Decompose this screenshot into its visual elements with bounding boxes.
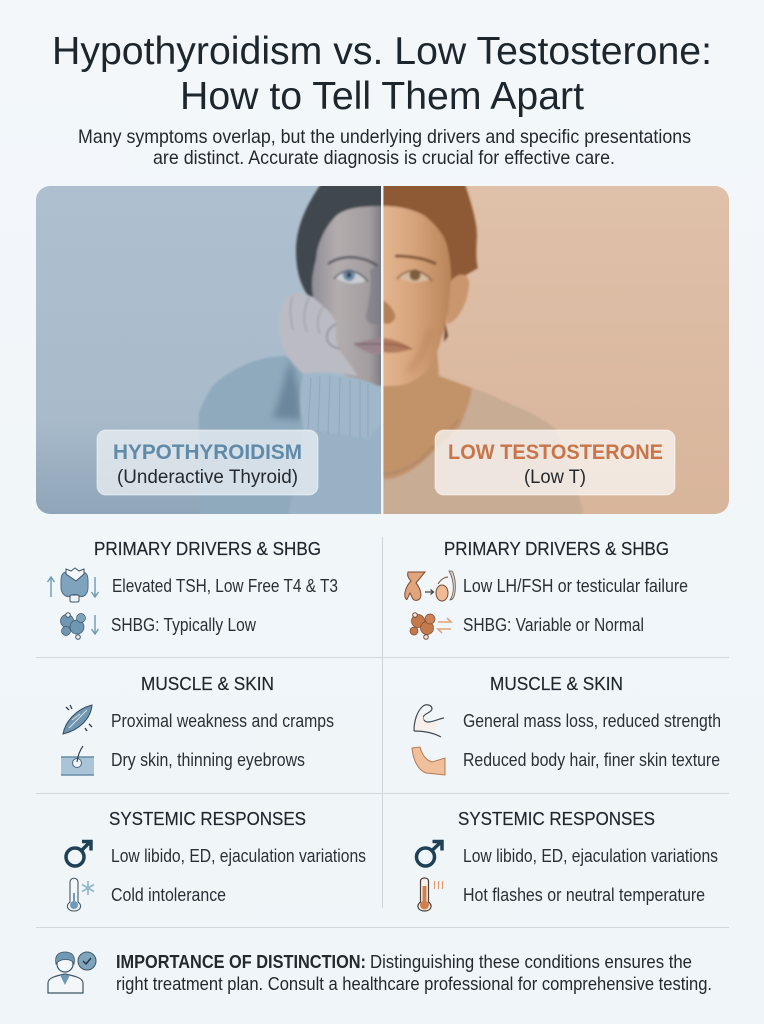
subtitle bbox=[78, 126, 691, 169]
icon: flexed arm bbox=[414, 705, 444, 737]
panel: primary drivers right: Low LH/FSH or testicular failure bbox=[463, 576, 688, 596]
label: hypothyroidism bbox=[97, 430, 318, 495]
icon: thermometer hot bbox=[418, 878, 443, 911]
panel: primary drivers right: PRIMARY DRIVERS & SHBG bbox=[444, 538, 669, 559]
portrait: low testosterone side bbox=[382, 184, 730, 516]
panel: muscle and skin left: Dry skin, thinning eyebrows bbox=[111, 750, 305, 770]
panel: systemic responses left: SYSTEMIC RESPONSES bbox=[109, 808, 306, 829]
panel: systemic responses right bbox=[416, 808, 718, 911]
panel: muscle and skin right: MUSCLE & SKIN bbox=[490, 673, 623, 694]
panel: muscle and skin right bbox=[412, 673, 721, 775]
title bbox=[52, 30, 712, 118]
panel: primary drivers right bbox=[405, 538, 688, 639]
panel: systemic responses left: Low libido, ED, ejaculation variations bbox=[111, 846, 366, 866]
portrait: hypothyroidism side bbox=[36, 184, 384, 516]
panel: systemic responses left: Cold intolerance bbox=[111, 885, 226, 905]
split portrait photo bbox=[36, 184, 730, 516]
panel: primary drivers left bbox=[48, 538, 338, 639]
panel: primary drivers left: SHBG: Typically Low bbox=[111, 615, 257, 635]
callout: importance of distinction bbox=[48, 952, 712, 994]
icon: skin layer bbox=[61, 746, 94, 775]
icon: male symbol bbox=[416, 842, 442, 866]
icon: SHBG molecule variable bbox=[410, 613, 451, 639]
label: low testosterone: (Low T) bbox=[524, 466, 586, 488]
title: How to Tell Them Apart bbox=[180, 75, 584, 118]
callout: importance of distinction: Distinguishing these conditions ensures the bbox=[370, 952, 692, 972]
callout: importance of distinction: right treatment plan. Consult a healthcare professional for comprehensive testing. bbox=[116, 974, 712, 994]
panel: systemic responses right: SYSTEMIC RESPONSES bbox=[458, 808, 655, 829]
panel: muscle and skin left bbox=[61, 673, 334, 775]
icon: bare arm bbox=[412, 747, 445, 775]
label: hypothyroidism: (Underactive Thyroid) bbox=[117, 466, 298, 488]
panel: primary drivers right: SHBG: Variable or Normal bbox=[463, 615, 644, 635]
panel: systemic responses left bbox=[66, 808, 366, 911]
icon: doctor with check bbox=[48, 952, 96, 993]
panel: muscle and skin right: General mass loss, reduced strength bbox=[463, 711, 721, 731]
panel: systemic responses right: Hot flashes or neutral temperature bbox=[463, 885, 705, 905]
subtitle: are distinct. Accurate diagnosis is crucial for effective care. bbox=[153, 147, 615, 169]
icon: muscle cramp bbox=[63, 705, 92, 734]
panel: systemic responses right: Low libido, ED, ejaculation variations bbox=[463, 846, 718, 866]
panel: primary drivers left: PRIMARY DRIVERS & SHBG bbox=[94, 538, 321, 559]
label: low testosterone: LOW TESTOSTERONE bbox=[448, 440, 663, 464]
icon: thyroid with arrows bbox=[48, 568, 98, 602]
label: hypothyroidism: HYPOTHYROIDISM bbox=[113, 440, 302, 464]
icon: pituitary to testis bbox=[405, 571, 455, 601]
title: Hypothyroidism vs. Low Testosterone: bbox=[52, 30, 712, 73]
panel: muscle and skin left: Proximal weakness and cramps bbox=[111, 711, 334, 731]
icon: male symbol bbox=[66, 842, 91, 866]
subtitle: Many symptoms overlap, but the underlying drivers and specific presentations bbox=[78, 126, 691, 148]
panel: primary drivers left: Elevated TSH, Low Free T4 & T3 bbox=[112, 576, 338, 596]
icon: SHBG molecule low bbox=[60, 613, 98, 639]
label: low testosterone bbox=[435, 430, 675, 495]
panel: muscle and skin left: MUSCLE & SKIN bbox=[141, 673, 274, 694]
icon: thermometer cold bbox=[67, 878, 94, 911]
panel: muscle and skin right: Reduced body hair, finer skin texture bbox=[463, 750, 720, 770]
callout: importance of distinction: IMPORTANCE OF DISTINCTION: bbox=[116, 952, 366, 972]
